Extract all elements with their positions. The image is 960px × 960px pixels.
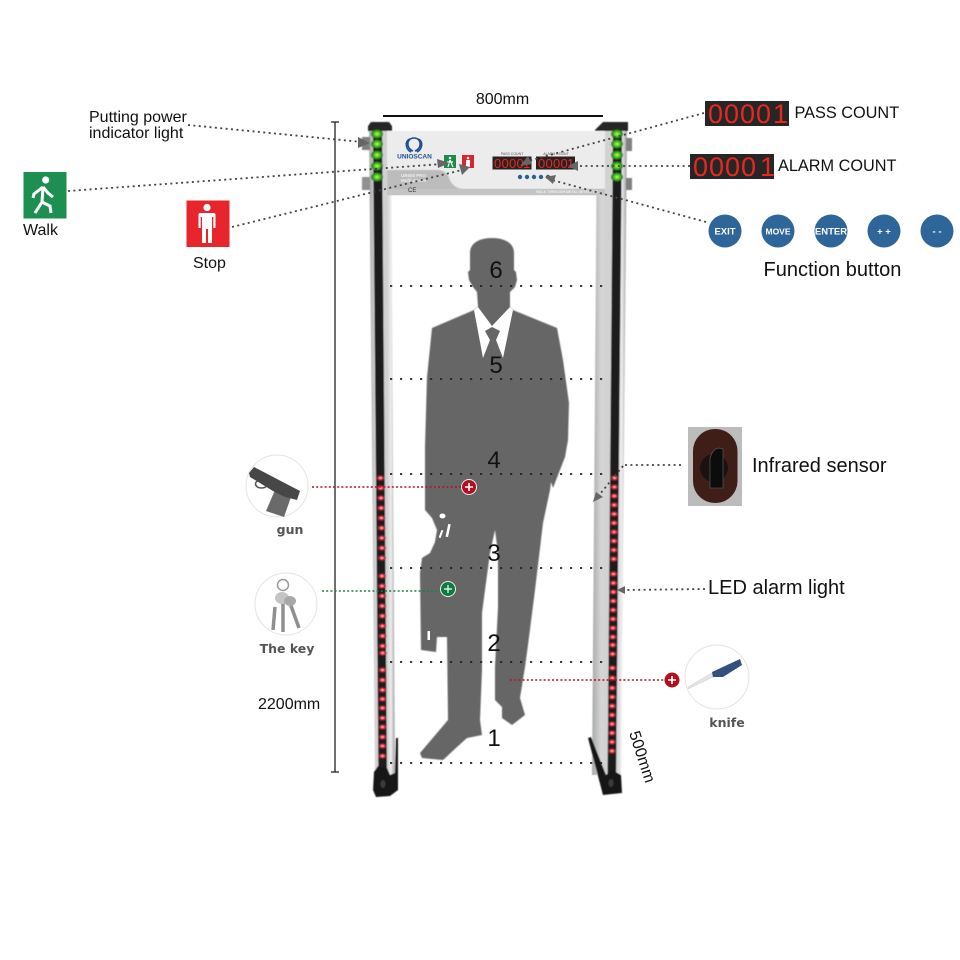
panel alarm display: ALARM COUNT [543, 152, 570, 156]
person silhouette [420, 238, 569, 760]
shirt collar around tie [474, 307, 513, 358]
zone numbers: 3 [487, 540, 501, 567]
alarm count display: 00001 [693, 152, 775, 182]
key item [255, 573, 456, 656]
LED alarm light label: LED alarm light [708, 577, 845, 599]
stop sign: Stop [193, 255, 226, 272]
logo: UNIOSCAN [397, 154, 432, 160]
key item: The key [260, 641, 314, 656]
infrared sensor: Infrared sensor [752, 455, 887, 477]
zone numbers: 4 [487, 447, 501, 474]
pass count display [520, 99, 899, 166]
pass count display: PASS COUNT [794, 104, 899, 122]
panel stop icon [462, 155, 474, 168]
panel pass display: 00001 [494, 156, 530, 171]
function buttons: ENTER [815, 226, 847, 238]
height dimension 2200mm: 2200mm [258, 696, 320, 713]
panel walk icon [444, 155, 456, 168]
LED alarm light label [617, 577, 845, 599]
right pillar [588, 122, 632, 795]
panel pass display: PASS COUNT [501, 152, 524, 156]
function buttons: + + [877, 226, 891, 238]
function buttons: Function button [764, 259, 901, 281]
function buttons [545, 175, 954, 281]
logo [397, 138, 432, 160]
zone numbers: 6 [489, 257, 503, 284]
alarm count display [568, 152, 897, 182]
infrared sensor [593, 427, 887, 506]
walk-through gate [362, 122, 632, 797]
left pillar [362, 122, 398, 797]
alarm count display: ALARM COUNT [778, 157, 897, 175]
power indicator label and leader: indicator light [89, 125, 184, 142]
green power indicator lights [371, 130, 623, 182]
top control panel: CE [408, 188, 416, 194]
walk sign [23, 159, 450, 239]
stop sign [186, 164, 470, 272]
top control panel: WALK THROUGH METAL DETECTOR [536, 190, 598, 194]
briefcase highlights [428, 514, 451, 640]
top control panel: UB500 PRO [401, 173, 427, 178]
depth dimension 500mm: 500mm [625, 729, 658, 785]
zone numbers: 5 [489, 352, 503, 379]
panel alarm display: 00001 [538, 156, 574, 171]
top control panel: Multi-Zones [401, 178, 427, 183]
red LED alarm lights [376, 475, 618, 759]
knife item [510, 645, 749, 730]
power indicator label and leader: Putting power [89, 109, 188, 126]
width dimension 800mm: 800mm [476, 91, 529, 108]
function buttons: MOVE [765, 226, 791, 236]
scan zone dotted lines [390, 286, 604, 763]
zone numbers: 1 [487, 725, 501, 752]
function buttons: - - [933, 226, 941, 238]
top control panel [387, 131, 605, 195]
zone numbers: 2 [487, 630, 501, 657]
panel buttons [518, 175, 550, 179]
gun item [246, 455, 476, 537]
zone numbers [487, 257, 503, 752]
gun item: gun [277, 522, 303, 537]
walk sign: Walk [23, 222, 59, 239]
pass count display: 00001 [708, 99, 788, 129]
knife item: knife [709, 715, 745, 730]
power indicator label and leader [89, 109, 370, 148]
function buttons: EXIT [714, 226, 736, 238]
